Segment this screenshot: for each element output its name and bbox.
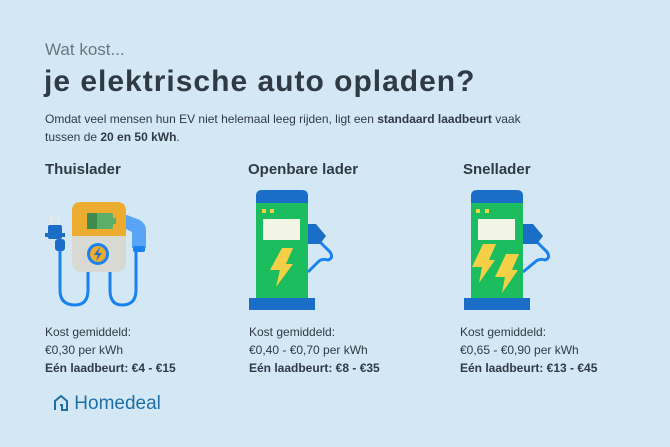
heading: Thuislader: Thuislader [45,161,121,178]
cost: Thuislader: Eén laadbeurt: €4 - €15 [45,361,176,375]
icon: home charger [45,202,146,305]
icon: fast charger [464,190,549,310]
intro text [45,112,521,144]
heading: Snellader: Snellader [463,161,531,178]
cost: Openbare lader: Kost gemiddeld: [249,325,335,339]
cost: Snellader [460,325,598,375]
logo: Homedeal: Homedeal [74,393,161,414]
cost: Snellader: Eén laadbeurt: €13 - €45 [460,361,597,375]
cost: Thuislader [45,325,176,375]
title: je elektrische auto opladen? [44,65,475,98]
heading: Openbare lader: Openbare lader [248,161,358,178]
cost: Snellader: Kost gemiddeld: [460,325,546,339]
cost: Openbare lader [249,325,380,375]
cost: Openbare lader: €0,40 - €0,70 per kWh [249,343,368,357]
cost: Thuislader: Kost gemiddeld: [45,325,131,339]
intro text: tussen de 20 en 50 kWh. [45,130,180,144]
cost: Snellader: €0,65 - €0,90 per kWh [460,343,579,357]
intro text: Omdat veel mensen hun EV niet helemaal leeg rijden, ligt een standaard laadbeurt vaak [45,112,521,126]
icon: public charger [249,190,332,310]
cost: Thuislader: €0,30 per kWh [45,343,123,357]
kicker: Wat kost... [45,40,125,59]
cost: Openbare lader: Eén laadbeurt: €8 - €35 [249,361,380,375]
